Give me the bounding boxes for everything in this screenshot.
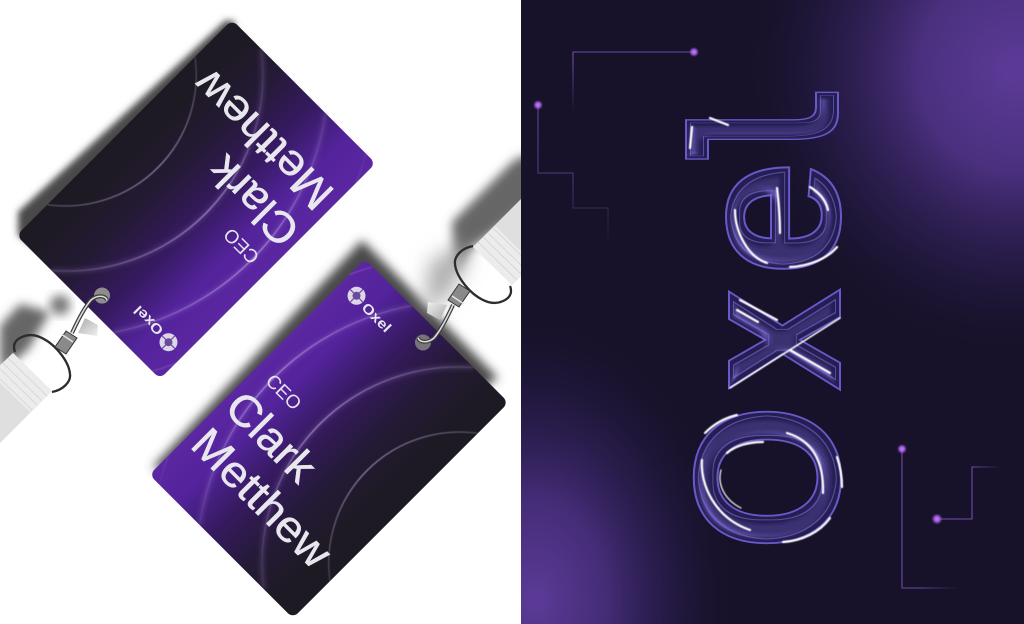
role: CEO [220,223,264,267]
curved light arcs [162,266,478,590]
role: CEO [261,371,305,415]
letter x: x [650,288,885,391]
ribbon stitching [473,226,534,285]
dark brand panel [521,0,1024,624]
letter e: e [649,160,884,277]
lanyard hole [91,284,113,307]
swivel [448,284,470,307]
letter l: l [653,83,886,165]
swivel [55,331,77,354]
glass wordmark Oxel [649,83,886,551]
ribbon [473,150,610,285]
card shadows [0,20,540,500]
name [180,382,376,578]
logo wordmark: Oxel [359,299,395,335]
circuit line: top [573,52,694,112]
logo icon [344,283,369,308]
card body [16,20,376,379]
logo icon [156,330,181,355]
D-ring [14,335,70,392]
ribbon stitching [0,353,52,412]
badge card: back, upside down [19,22,373,376]
specular highlights [690,118,842,542]
letter O: O [652,404,884,551]
clip body [78,318,98,336]
glowing nodes [533,47,942,524]
lanyard and clip: back card [0,296,107,488]
hook [72,296,107,333]
badge card: front [152,262,506,616]
curved light arcs [47,48,364,372]
hook [418,305,453,342]
lanyard and clip: front card [418,150,610,342]
name: Clark [198,145,309,256]
circuit line: bottom [902,449,958,588]
name: Clark [216,382,327,493]
name [149,60,345,256]
logo wordmark: Oxel [130,303,166,339]
card body [149,259,509,618]
circuit line: bottom right [937,467,1002,519]
lanyard hole [412,331,434,354]
circuit line: left stepped [538,105,608,248]
name: Metthew [184,60,343,219]
D-ring [455,246,511,303]
white background panel [0,0,521,624]
ribbon [0,353,52,488]
name: Metthew [182,419,341,578]
clip body [427,302,447,320]
